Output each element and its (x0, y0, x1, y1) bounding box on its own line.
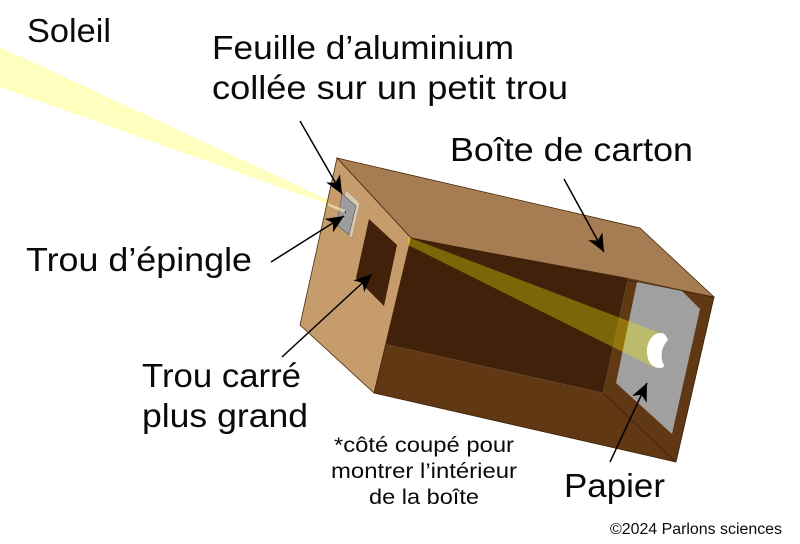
label: pinhole: Trou d’épingle (26, 241, 252, 278)
arrow: cardboard box (564, 179, 604, 252)
square hole (356, 219, 397, 306)
note: side cut away: montrer l’intérieur (331, 460, 517, 483)
arrow: pinhole (271, 216, 344, 262)
aluminium foil (337, 190, 360, 238)
label: square hole: plus grand (142, 397, 308, 434)
cardboard box (300, 158, 714, 462)
sunlight beam (0, 47, 335, 207)
pinhole (344, 211, 346, 213)
label: cardboard box: Boîte de carton (450, 131, 693, 168)
label: aluminium foil: Feuille d’aluminium (212, 29, 514, 66)
box top face (337, 158, 714, 297)
label: paper: Papier (564, 467, 665, 504)
paper sheet (616, 282, 700, 434)
copyright: ©2024 Parlons sciences (610, 521, 782, 538)
arrow: foil (300, 121, 342, 194)
arrow: square hole (282, 274, 372, 357)
crescent image of the sun (647, 333, 668, 368)
box inner back wall (385, 238, 628, 393)
label: Soleil: Soleil (27, 12, 111, 49)
note: side cut away: *côté coupé pour (334, 434, 514, 457)
label: aluminium foil: collée sur un petit trou (212, 69, 568, 106)
label: square hole: Trou carré (142, 357, 301, 394)
light entering the pinhole (328, 203, 345, 213)
box inner end wall (603, 278, 714, 462)
note: side cut away: de la boîte (369, 486, 479, 509)
box bottom face (374, 344, 676, 462)
beam inside box (408, 237, 660, 367)
box front face (300, 158, 411, 393)
arrow: paper (610, 383, 647, 462)
